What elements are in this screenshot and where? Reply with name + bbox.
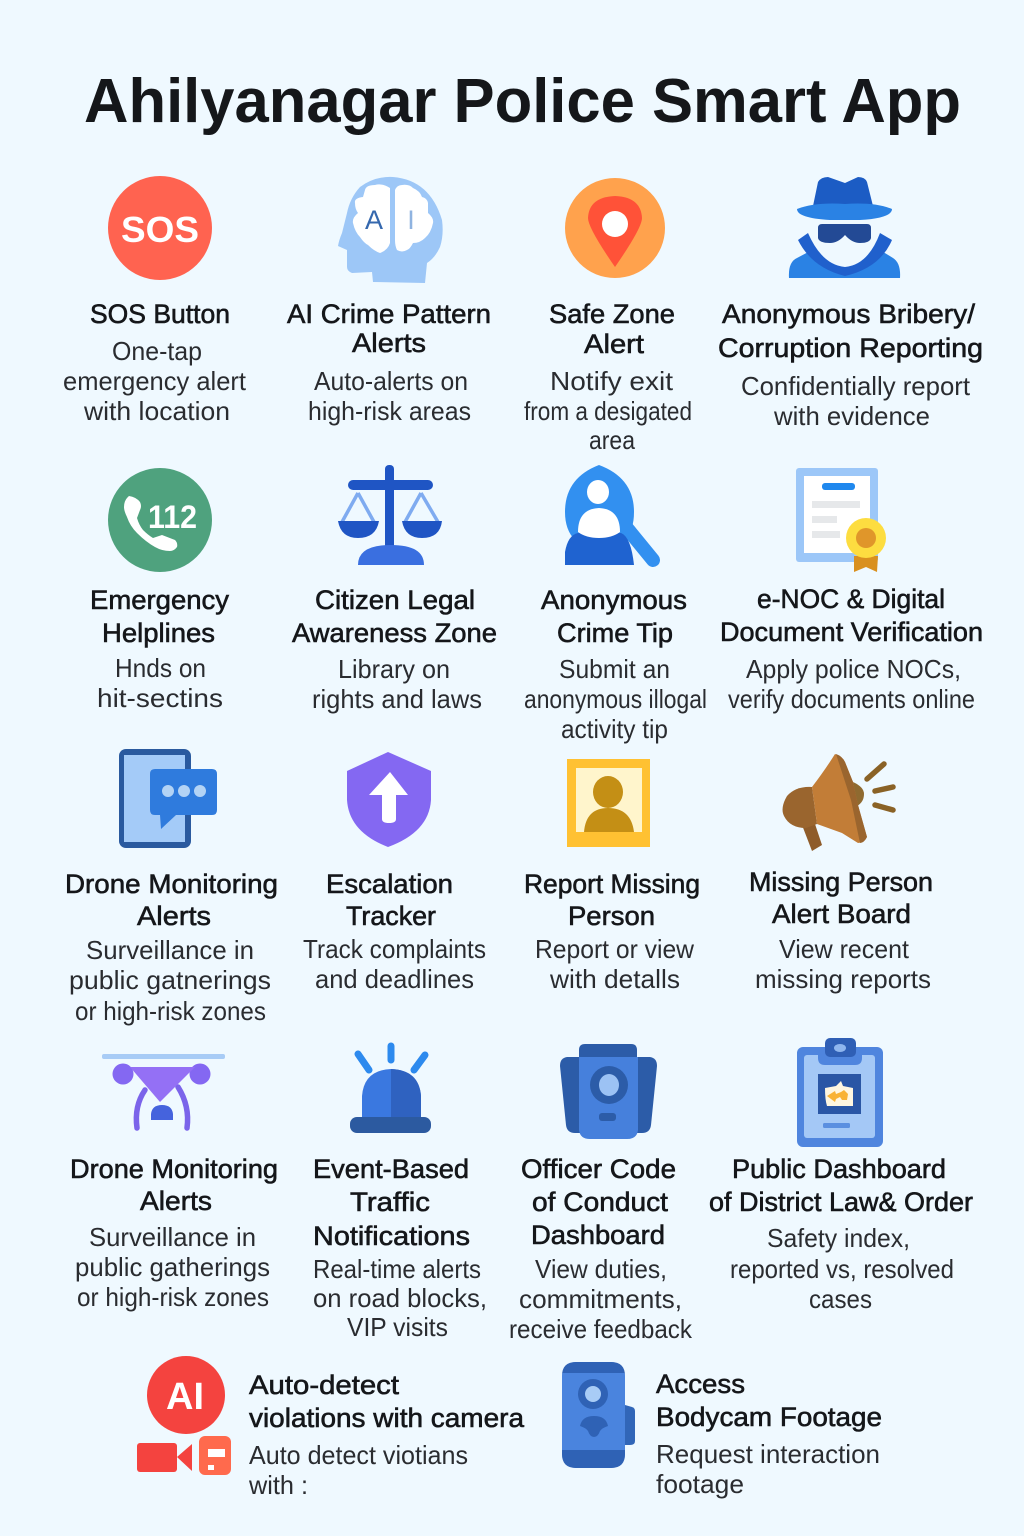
text: bodycam description: footage [656, 1469, 744, 1499]
icon: AI head [338, 177, 443, 283]
text: NOC description: Apply police NOCs, [746, 654, 961, 684]
heading: Safe Zone Alert: Safe Zone [549, 299, 675, 329]
text: public dashboard description: cases [809, 1284, 872, 1314]
text: SOS description: with location [83, 396, 230, 426]
icon: phone with chat [119, 749, 217, 848]
icon: SOS [108, 176, 212, 280]
text: legal description: Library on [338, 654, 450, 684]
heading: Missing Person Alert Board [749, 867, 933, 929]
heading: Emergency Helplines [90, 585, 230, 648]
heading: Officer Code of Conduct Dashboard: of Conduct [532, 1187, 669, 1217]
heading: Anonymous Crime Tip: Crime Tip [557, 618, 673, 648]
heading: Citizen Legal Awareness Zone [292, 585, 497, 648]
heading: Drone Monitoring Alerts: Alerts [137, 901, 211, 931]
icon: shield with arrow [347, 752, 431, 847]
panel: Missing Person Alert Board [749, 754, 933, 994]
panel: Drone Monitoring Alerts (row 3) [65, 749, 278, 1026]
icon: AI head: I [407, 205, 415, 235]
text: conduct description: commitments, [519, 1284, 682, 1314]
text: reporting description: Confidentially report [741, 371, 971, 401]
heading: Escalation Tracker: Escalation [326, 869, 453, 899]
text: drone description [75, 1222, 270, 1312]
icon: siren [350, 1046, 431, 1133]
panel: Emergency Helplines [90, 468, 230, 713]
text: escalation description [303, 934, 486, 994]
text: Safe Zone description: area [589, 425, 635, 455]
text: drone description: public gatherings [75, 1252, 270, 1282]
icon: body camera [560, 1044, 657, 1139]
text: traffic description: Real-time alerts [313, 1254, 481, 1284]
heading: e-NOC & Digital Document Verification: Document Verification [720, 617, 983, 647]
text: Safe Zone description: Notify exit [550, 366, 674, 396]
icon: AI camera: AI [166, 1376, 204, 1418]
heading: Drone Monitoring Alerts: Drone Monitoring [70, 1154, 278, 1184]
heading: Public Dashboard of District Law & Order: Public Dashboard [732, 1154, 946, 1184]
heading: Escalation Tracker: Tracker [346, 901, 436, 931]
title: Ahilyanagar Police Smart App [84, 67, 961, 136]
text: public dashboard description [730, 1223, 954, 1314]
text: bodycam description: Request interaction [656, 1439, 880, 1469]
text: report description: with detalls [549, 964, 680, 994]
text: SOS description: One-tap [112, 336, 202, 366]
text: auto-detect description [248, 1440, 468, 1500]
heading: Public Dashboard of District Law & Order: of District Law& Order [709, 1187, 973, 1217]
icon: certificate document [796, 468, 886, 572]
heading: Citizen Legal Awareness Zone: Awareness Zone [292, 618, 497, 648]
icon: bodycam [562, 1362, 635, 1468]
text: NOC description [728, 654, 975, 714]
heading: Report Missing Person: Report Missing [524, 869, 700, 899]
text: traffic description: on road blocks, [313, 1283, 487, 1313]
icon: map pin [565, 178, 665, 278]
text: conduct description: View duties, [535, 1254, 667, 1284]
text: public dashboard description: Safety index, [767, 1223, 910, 1253]
text: escalation description: and deadlines [315, 964, 474, 994]
text: AI description: Auto-alerts on [314, 366, 468, 396]
heading: Anonymous Crime Tip [541, 585, 687, 648]
heading: Drone Monitoring Alerts [70, 1154, 278, 1216]
heading: Escalation Tracker [326, 869, 453, 931]
heading: Missing Person Alert Board: Alert Board [772, 899, 911, 929]
heading: Access Bodycam Footage: Access [656, 1369, 745, 1399]
text: legal description: rights and laws [312, 684, 482, 714]
heading: Anonymous Bribery/Corruption Reporting: Anonymous Bribery/ [722, 299, 976, 329]
text: legal description [312, 654, 482, 714]
text: drone description: Surveillance in [86, 935, 254, 965]
text: reporting description [741, 371, 971, 431]
text: Safe Zone description [524, 366, 692, 455]
panel: Auto-detect violations with camera [137, 1356, 525, 1500]
icon: spy [789, 177, 900, 278]
heading: Access Bodycam Footage [656, 1369, 882, 1432]
text: AI description: high-risk areas [308, 396, 471, 426]
text: helplines description: hit-sectins [97, 683, 223, 713]
heading: Safe Zone Alert [549, 299, 675, 359]
text: auto-detect description: with : [248, 1470, 308, 1500]
text: tip description: Submit an [559, 654, 670, 684]
text: drone description: Surveillance in [89, 1222, 256, 1252]
panel: Report Missing Person [524, 759, 700, 994]
heading: Event-Based Traffic Notifications: Traffic [350, 1187, 430, 1217]
heading: Safe Zone Alert: Alert [584, 329, 645, 359]
text: helplines description: Hnds on [115, 653, 206, 683]
panel: Citizen Legal Awareness Zone [292, 465, 497, 714]
heading: Event-Based Traffic Notifications [313, 1154, 470, 1251]
heading: e-NOC & Digital Document Verification [720, 584, 983, 647]
heading: Missing Person Alert Board: Missing Person [749, 867, 933, 897]
text: report description: Report or view [535, 934, 694, 964]
text: escalation description: Track complaints [303, 934, 486, 964]
heading: Event-Based Traffic Notifications: Notifications [313, 1221, 470, 1251]
heading: Access Bodycam Footage: Bodycam Footage [656, 1402, 882, 1432]
text: SOS description: emergency alert [63, 366, 247, 396]
panel: e-NOC & Digital Document Verification [720, 468, 983, 714]
panel: Public Dashboard of District Law & Order [709, 1038, 973, 1314]
text: alert board description: View recent [779, 934, 910, 964]
text: tip description [524, 654, 707, 744]
panel: Anonymous Bribery/Corruption Reporting [718, 177, 983, 431]
heading: AI Crime Pattern Alerts: AI Crime Pattern [287, 299, 491, 329]
text: NOC description: verify documents online [728, 684, 975, 714]
text: drone description [69, 935, 271, 1026]
heading: Anonymous Bribery/Corruption Reporting [718, 299, 983, 363]
icon: drone [102, 1054, 225, 1128]
text: drone description: or high-risk zones [75, 996, 266, 1026]
heading: Drone Monitoring Alerts: Alerts [140, 1186, 212, 1216]
icon: scales of justice [338, 465, 442, 565]
text: tip description: anonymous illogal [524, 684, 707, 714]
panel: Access Bodycam Footage [562, 1362, 882, 1499]
heading: AI Crime Pattern Alerts [287, 299, 491, 358]
icon: AI camera [137, 1356, 231, 1475]
panel: AI Crime Pattern Alerts [287, 177, 491, 426]
text: report description [535, 934, 694, 994]
icon: 112 phone [108, 468, 212, 572]
heading: Citizen Legal Awareness Zone: Citizen Legal [315, 585, 475, 615]
text: tip description: activity tip [561, 714, 668, 744]
heading: Emergency Helplines: Emergency [90, 585, 230, 615]
text: Safe Zone description: from a desigated [524, 396, 692, 426]
text: traffic description [313, 1254, 487, 1342]
panel: SOS Button [63, 176, 247, 426]
text: alert board description: missing reports [755, 964, 931, 994]
icon: 112 phone: 112 [148, 499, 197, 535]
text: SOS description [63, 336, 247, 426]
icon: clipboard dashboard [797, 1038, 883, 1147]
text: bodycam description [656, 1439, 880, 1499]
text: auto-detect description: Auto detect viotians [249, 1440, 468, 1470]
icon: megaphone [783, 754, 893, 851]
heading: Officer Code of Conduct Dashboard: Officer Code [521, 1154, 676, 1184]
icon: SOS: SOS [121, 209, 199, 250]
text: traffic description: VIP visits [347, 1312, 448, 1342]
text: public dashboard description: reported vs, resolved [730, 1254, 954, 1284]
text: conduct description [509, 1254, 693, 1344]
panel: Drone Monitoring Alerts (row 4) [70, 1054, 278, 1312]
heading: SOS Button: SOS Button [90, 299, 230, 329]
heading: Drone Monitoring Alerts: Drone Monitoring [65, 869, 278, 899]
text: drone description: public gatnerings [69, 965, 271, 995]
text: drone description: or high-risk zones [77, 1282, 269, 1312]
icon: portrait frame [567, 759, 650, 847]
heading: Emergency Helplines: Helplines [102, 618, 215, 648]
text: AI description [308, 366, 471, 426]
text: helplines description [97, 653, 223, 713]
heading: Anonymous Bribery/Corruption Reporting: Corruption Reporting [718, 333, 983, 363]
heading: Public Dashboard of District Law & Order [709, 1154, 973, 1217]
text: alert board description [755, 934, 931, 994]
panel: Event-Based Traffic Notifications [313, 1046, 487, 1342]
heading: Report Missing Person [524, 869, 700, 931]
heading: Event-Based Traffic Notifications: Event-Based [313, 1154, 469, 1184]
heading: Anonymous Crime Tip: Anonymous [541, 585, 687, 615]
heading: Auto-detect violations [249, 1370, 525, 1433]
panel: Officer Code of Conduct Dashboard [509, 1044, 693, 1344]
text: reporting description: with evidence [773, 401, 930, 431]
panel: Escalation Tracker [303, 752, 486, 994]
heading: Officer Code of Conduct Dashboard [521, 1154, 676, 1250]
heading: AI Crime Pattern Alerts: Alerts [352, 328, 426, 358]
heading: Officer Code of Conduct Dashboard: Dashboard [531, 1220, 665, 1250]
heading: Report Missing Person: Person [568, 901, 655, 931]
heading: Drone Monitoring Alerts [65, 869, 278, 931]
heading: Auto-detect violations: violations with camera [249, 1403, 525, 1433]
heading: e-NOC & Digital Document Verification: e-NOC & Digital [757, 584, 945, 614]
icon: AI head: A [365, 205, 383, 235]
icon: person with magnifier [565, 465, 653, 565]
panel: Safe Zone Alert [524, 178, 692, 455]
panel: Anonymous Crime Tip [524, 465, 707, 744]
text: conduct description: receive feedback [509, 1314, 693, 1344]
heading: Auto-detect violations: Auto-detect [249, 1370, 400, 1400]
